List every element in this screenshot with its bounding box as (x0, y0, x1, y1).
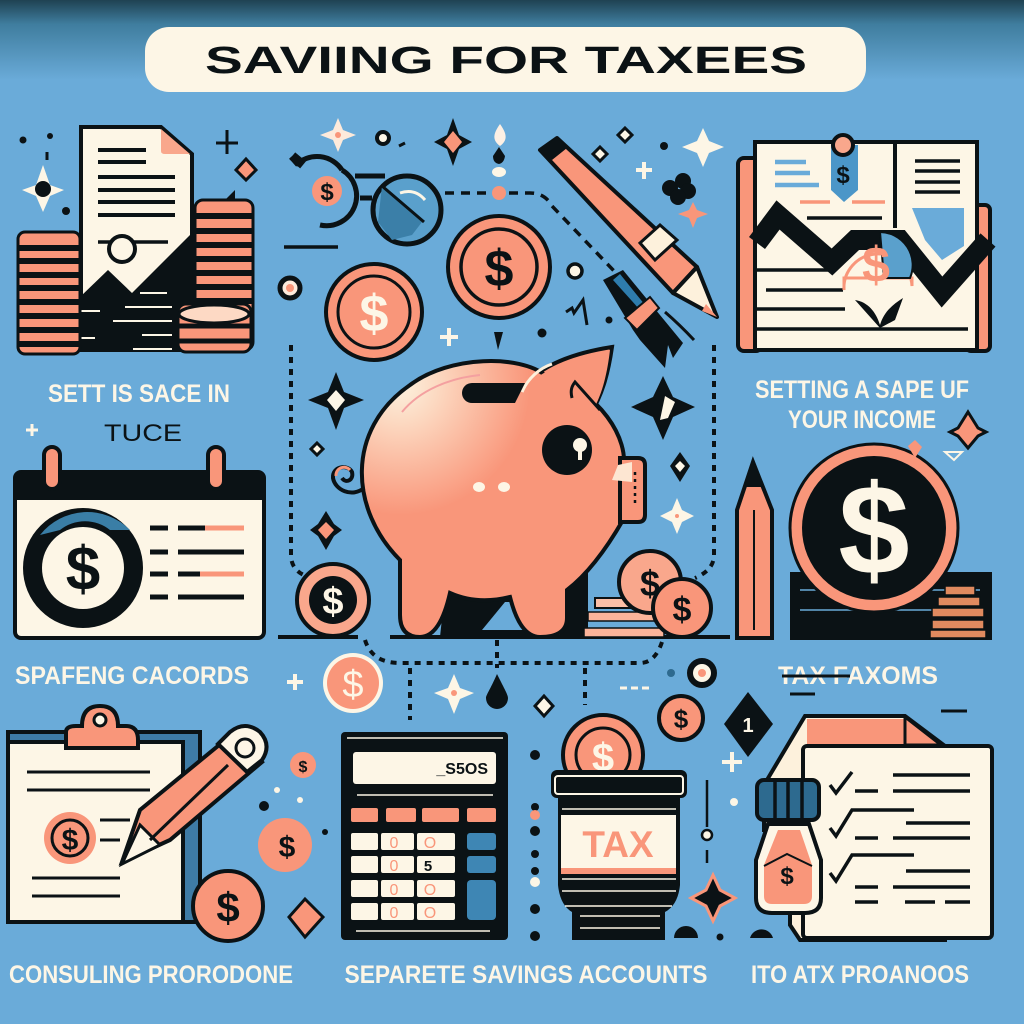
calculator: O (424, 882, 436, 899)
label: spafeng: SPAFENG CACORDS (15, 662, 249, 690)
label tuck: TUCE (104, 420, 182, 447)
panel: clipboard (8, 706, 200, 922)
coin left: $ (360, 285, 389, 343)
coins bottom left: $ (216, 884, 240, 931)
panel: book chart (738, 135, 990, 351)
label: ito: ITO ATX PROANOOS (751, 961, 969, 989)
panel: book chart: $ (862, 237, 890, 293)
calculator: O (424, 905, 436, 922)
icon: sparkles top (320, 118, 724, 179)
top gradient band (0, 0, 1024, 80)
panel: clipboard: $ (62, 824, 79, 857)
coins near pig (584, 551, 711, 637)
calculator: 0 (390, 835, 399, 852)
dots and sparkle column (530, 750, 773, 941)
calculator key digit: 5 (424, 858, 432, 875)
panel: big coin with pencil: $ (838, 459, 910, 602)
label left: SETT IS SACE IN (48, 380, 230, 408)
title (145, 27, 866, 92)
label right: SETTING A SAPE UF (755, 376, 969, 404)
label right: YOUR INCOME (788, 406, 936, 434)
dashed frame (291, 345, 714, 720)
icon: club sparkle (662, 173, 708, 228)
icon: plus (722, 752, 742, 772)
icon: connector dot (492, 186, 506, 200)
sparkles around pig (308, 372, 695, 550)
diamond with 1: 1 (742, 715, 754, 737)
pig illustration (333, 347, 645, 637)
label right (755, 376, 969, 434)
calculator: 0 (390, 858, 399, 875)
dashed connector (445, 193, 615, 272)
gap under pig (482, 602, 535, 630)
middle row icons (287, 653, 714, 716)
coins bottom left (193, 752, 328, 941)
diamond with 1 (724, 692, 773, 757)
panel: glasses: $ (320, 179, 334, 206)
coins bottom left: $ (279, 831, 296, 864)
panel: big coin with pencil (737, 412, 992, 640)
label: separate: SEPARETE SAVINGS ACCOUNTS (344, 961, 708, 989)
calculator: _S5OS (435, 761, 488, 778)
label: consuling: CONSULING PRORODONE (9, 961, 293, 989)
icon: plus (216, 130, 238, 154)
calculator: 0 (390, 882, 399, 899)
panel: calendar (15, 447, 264, 638)
coin left of pig (297, 564, 369, 636)
icon: small circles and marks (280, 247, 612, 350)
coin left of pig: $ (322, 581, 344, 623)
calculator: 0 (390, 905, 399, 922)
coin small (659, 696, 703, 740)
plus small (26, 424, 38, 436)
folder checklist (764, 716, 992, 940)
pig shadow between legs (440, 570, 588, 637)
icon: marker (603, 270, 694, 368)
icon: pencil (122, 726, 267, 864)
coins bottom left: $ (299, 759, 308, 776)
panel: book chart: $ (836, 162, 850, 189)
middle row icons: $ (342, 664, 364, 706)
coin large (448, 216, 550, 318)
bottle: $ (780, 863, 794, 890)
tax jar: $ (592, 736, 614, 780)
calculator: O (424, 835, 436, 852)
floor line (278, 635, 730, 639)
panel: document and coins (18, 127, 253, 354)
tax jar: TAX (582, 824, 654, 865)
icon: small diamond (236, 159, 256, 180)
bottle (756, 780, 821, 913)
panel: calendar: $ (66, 535, 100, 604)
tax jar (551, 715, 687, 940)
coin left (326, 264, 422, 360)
coins near pig: $ (673, 591, 692, 629)
icon: pen (540, 138, 717, 317)
panel: glasses (289, 152, 441, 244)
coins near pig: $ (640, 563, 660, 604)
title: SAVIING FOR TAXEES (205, 40, 807, 82)
coin small: $ (674, 704, 689, 734)
calculator (341, 732, 508, 940)
coin large: $ (485, 240, 514, 298)
icon: sparkle (20, 133, 70, 215)
label: tax forms: TAX FAXOMS (778, 662, 938, 690)
